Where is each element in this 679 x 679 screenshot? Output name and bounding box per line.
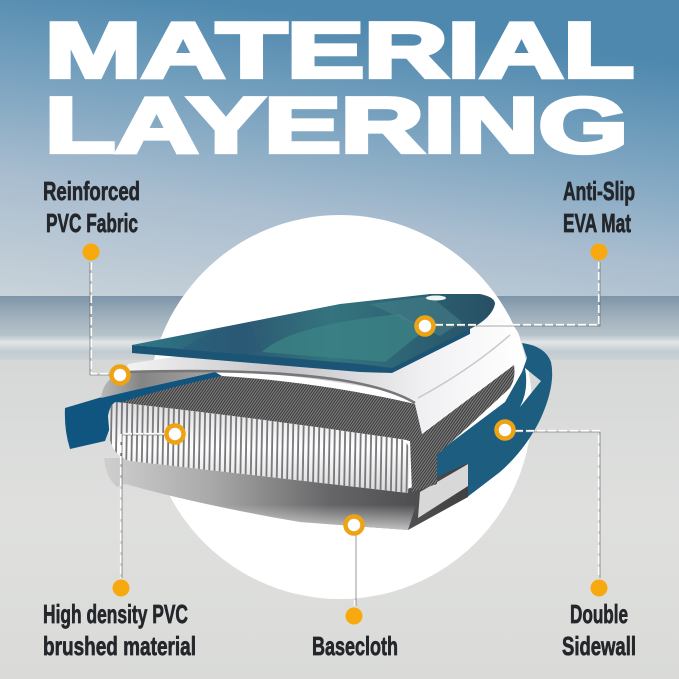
label: reinforced PVC fabric — [43, 176, 140, 238]
gray underside of top fabric — [101, 371, 215, 398]
label: reinforced PVC fabric: PVC Fabric — [46, 208, 138, 238]
title — [45, 6, 634, 169]
ring: deck — [416, 318, 434, 334]
title: LAYERING — [45, 81, 628, 169]
marker: reinforced PVC fabric — [82, 244, 100, 260]
left blue strap — [65, 372, 222, 449]
ring: fabric — [112, 366, 128, 384]
top mesh — [116, 376, 422, 442]
marker: basecloth — [346, 608, 362, 624]
label: anti-slip EVA mat: EVA Mat — [563, 208, 631, 238]
white circle backdrop — [148, 215, 532, 599]
label: high density PVC brushed material: brushed material — [43, 631, 196, 661]
bottom basecloth — [104, 458, 468, 530]
right blue sidewall — [437, 343, 552, 498]
ring: sidewall — [496, 422, 514, 438]
top deck edge — [132, 328, 470, 373]
marker: high density PVC — [112, 580, 130, 596]
anti-slip EVA deck — [132, 294, 495, 368]
paddle board layered cross-section — [65, 294, 552, 530]
label: reinforced PVC fabric: Reinforced — [43, 176, 140, 206]
white top fabric — [125, 318, 521, 433]
label: basecloth: Basecloth — [312, 631, 398, 661]
label: double sidewall: Sidewall — [562, 631, 636, 661]
marker: anti-slip EVA mat — [590, 244, 608, 260]
label: double sidewall: Double — [570, 599, 628, 629]
callout lines — [90, 262, 600, 606]
ring: fins — [166, 426, 184, 442]
PVC drop-stitch fins — [108, 402, 410, 493]
marker: double sidewall — [590, 580, 608, 596]
title: MATERIAL — [45, 6, 634, 94]
ring: basecloth — [346, 516, 362, 534]
label: high density PVC brushed material: High density PVC — [43, 599, 188, 629]
label: high density PVC brushed material — [43, 599, 196, 661]
label: anti-slip EVA mat — [563, 176, 635, 238]
side mesh — [410, 365, 514, 492]
label: anti-slip EVA mat: Anti-Slip — [563, 176, 635, 206]
label: double sidewall — [562, 599, 636, 661]
